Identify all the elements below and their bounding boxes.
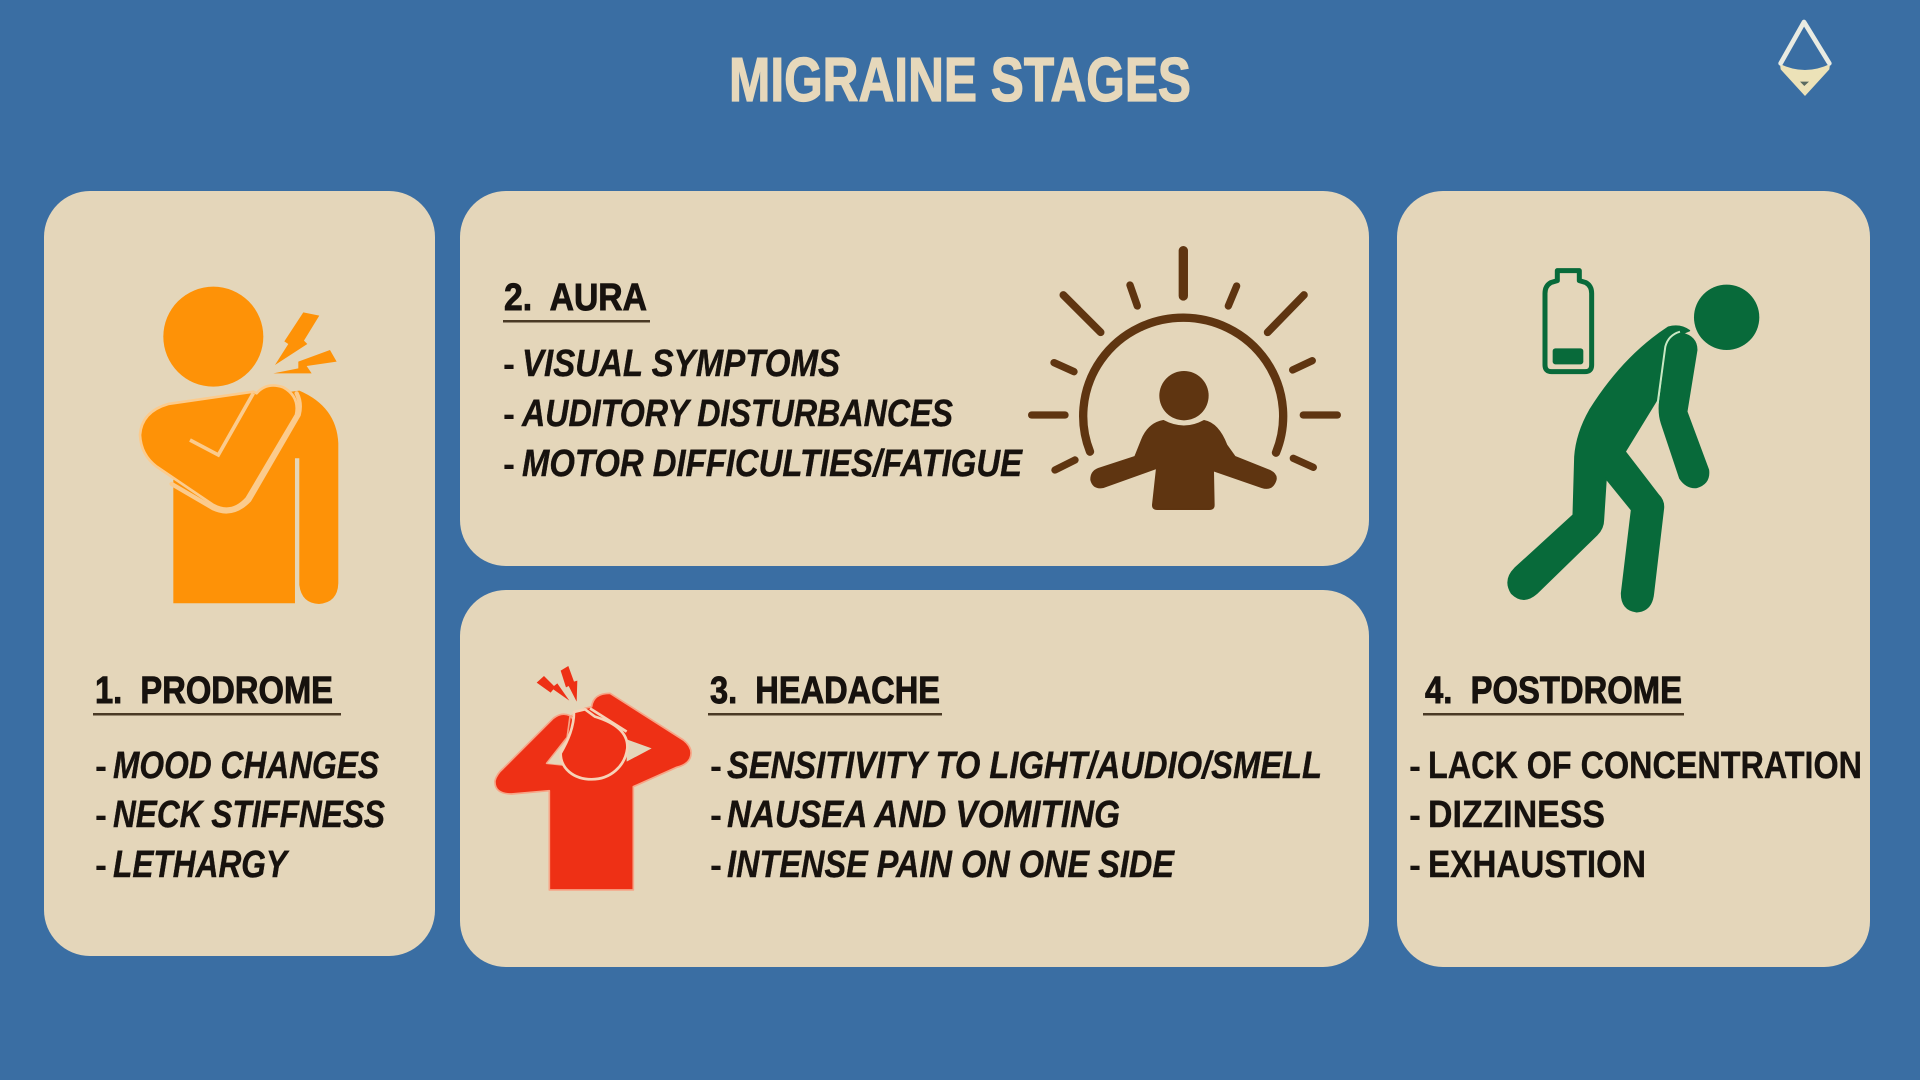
icon: low battery [1545,271,1592,372]
symptoms list: headache [710,745,1322,886]
icon: exhausted stooped person [1508,285,1759,612]
heading: 3. headache: 3. HEADACHE [710,670,940,712]
symptoms list: headache: - [710,844,722,885]
symptoms list: aura: VISUAL SYMPTOMS [522,343,840,385]
symptoms list: prodrome: MOOD CHANGES [113,745,379,787]
title: MIGRAINE STAGES [729,46,1191,115]
symptoms list: aura: AUDITORY DISTURBANCES [521,393,953,435]
panel: aura [460,191,1369,566]
symptoms list: headache: NAUSEA AND VOMITING [727,794,1120,836]
symptoms list: headache: - [710,794,722,835]
symptoms list: prodrome: LETHARGY [113,844,290,886]
symptoms list: postdrome: EXHAUSTION [1428,844,1646,886]
symptoms list: headache: SENSITIVITY TO LIGHT/AUDIO/SMELL [727,745,1322,787]
heading: 1. prodrome: 1. PRODROME [95,670,333,712]
symptoms list: prodrome [95,745,385,886]
symptoms list: prodrome: - [95,745,107,786]
symptoms list: postdrome: DIZZINESS [1428,794,1605,836]
symptoms list: aura [503,343,1023,485]
icon: logo [1780,22,1830,96]
icon: person holding sore shoulder [140,287,338,604]
symptoms list: prodrome: NECK STIFFNESS [113,794,385,836]
symptoms list: postdrome: - [1409,745,1421,786]
symptoms list: postdrome [1409,745,1862,886]
panel: prodrome [44,191,435,956]
symptoms list: headache: - [710,745,722,786]
symptoms list: aura: - [503,393,515,434]
symptoms list: aura: - [503,343,515,384]
panel: headache [460,590,1369,967]
symptoms list: prodrome: - [95,844,107,885]
heading: 2. aura: 2. AURA [504,277,647,319]
symptoms list: headache: INTENSE PAIN ON ONE SIDE [727,844,1175,886]
symptoms list: postdrome: - [1409,794,1421,835]
heading: 4. postdrome: 4. POSTDROME [1425,670,1682,712]
symptoms list: postdrome: - [1409,844,1421,885]
symptoms list: aura: MOTOR DIFFICULTIES/FATIGUE [522,443,1023,485]
symptoms list: aura: - [503,443,515,484]
symptoms list: prodrome: - [95,794,107,835]
panel: postdrome [1397,191,1870,967]
icon: person with radiating aura [1032,251,1337,509]
icon: person holding head in pain [495,666,691,890]
